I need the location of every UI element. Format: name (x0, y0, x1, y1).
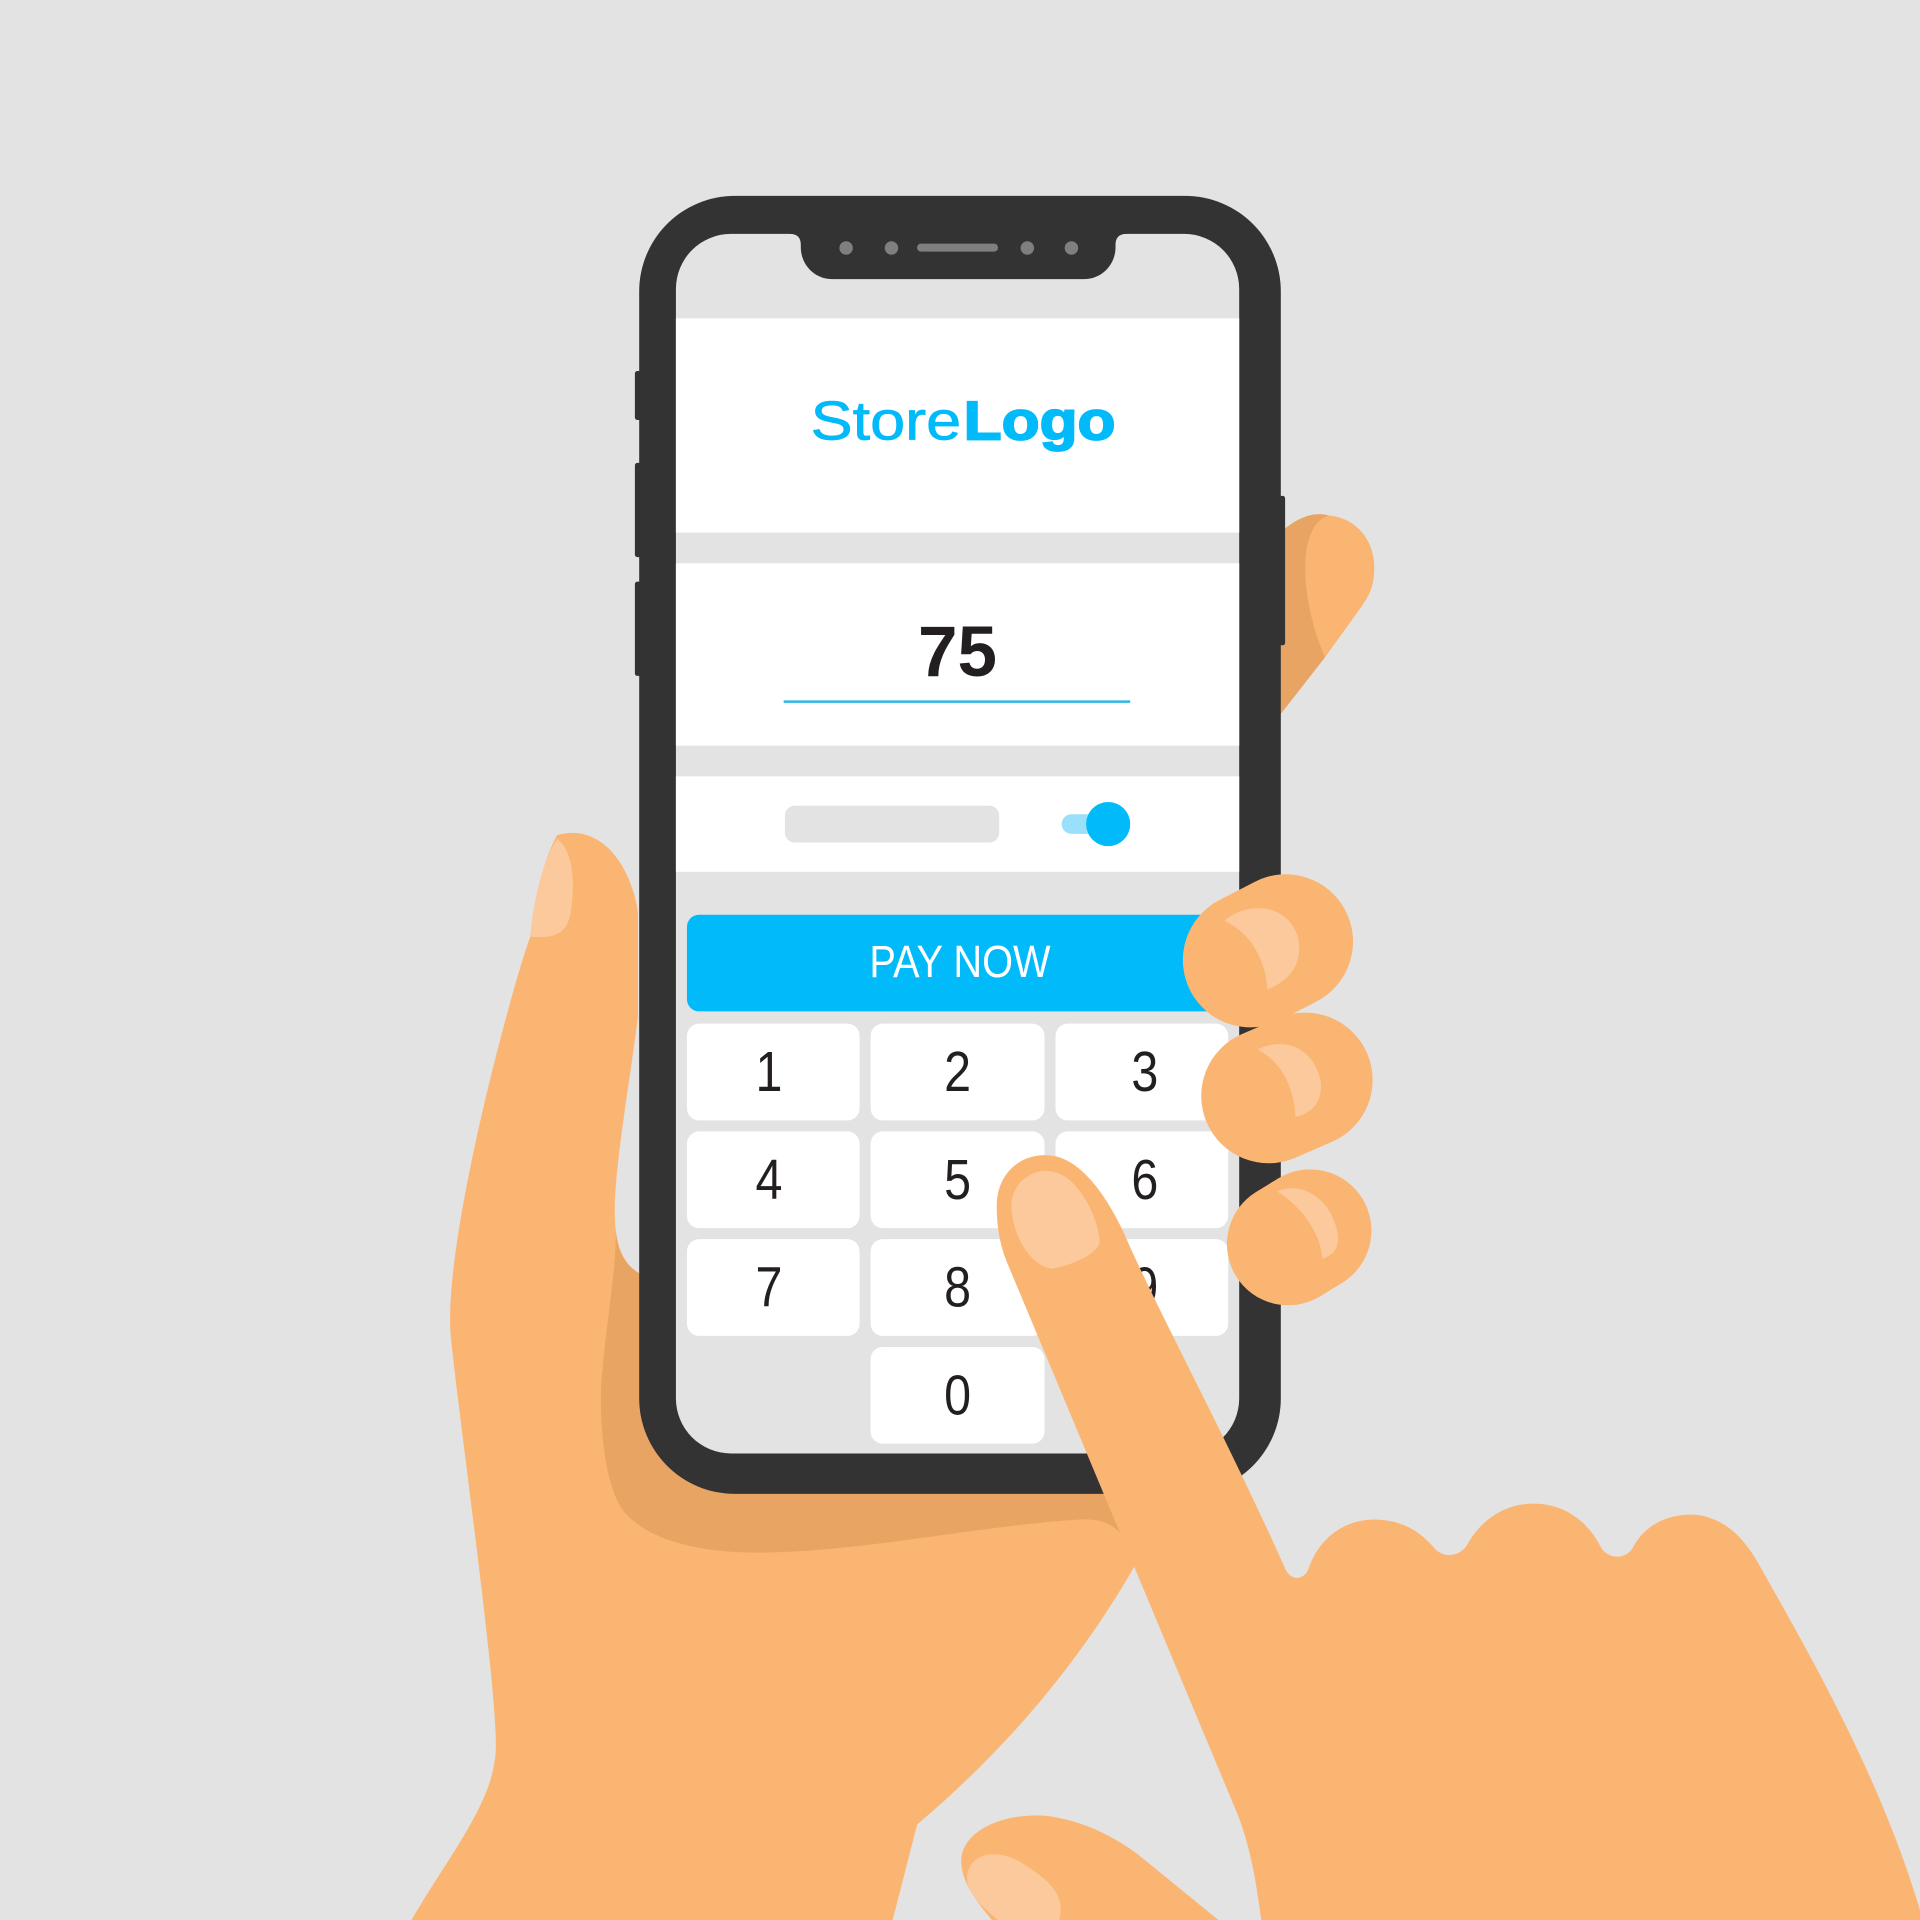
phone body (639, 196, 1281, 1494)
option panel (676, 776, 1239, 872)
store logo (811, 390, 1116, 452)
amount panel (676, 563, 1239, 746)
keypad: 7 (756, 1256, 782, 1319)
finger three (1277, 1188, 1338, 1259)
right hand thumb (961, 1815, 1218, 1920)
side buttons (635, 371, 1285, 676)
store logo: Store (811, 390, 961, 452)
finger one (1224, 908, 1299, 989)
toggle (1062, 802, 1130, 846)
option field (785, 806, 999, 842)
keypad: 8 (944, 1256, 971, 1319)
finger two (1258, 1044, 1321, 1117)
keypad: 6 (1131, 1148, 1158, 1211)
keypad: 3 (1131, 1040, 1158, 1103)
left thumb nail (530, 839, 573, 937)
left hand palm and thumb (411, 833, 1139, 1920)
amount underline (784, 700, 1130, 703)
logo panel (676, 318, 1239, 533)
screen (676, 234, 1239, 1453)
keypad: 4 (756, 1148, 782, 1211)
notch (790, 227, 1127, 279)
pay now button (687, 915, 1226, 1011)
keypad: 1 (756, 1040, 782, 1103)
right hand with pointing finger (997, 1155, 1920, 1920)
keypad: 2 (944, 1040, 971, 1103)
amount: 75 (918, 613, 997, 692)
back fingertip behind phone (1273, 514, 1374, 714)
palm shadow (601, 1231, 1124, 1553)
phone (635, 196, 1285, 1494)
pay now button: PAY NOW (869, 936, 1051, 987)
camera dots and speaker (839, 241, 1078, 255)
keypad: 0 (944, 1363, 971, 1426)
keypad (687, 1024, 1228, 1444)
keypad: 5 (944, 1148, 971, 1211)
store logo: Logo (964, 390, 1116, 452)
keypad: 9 (1131, 1256, 1158, 1319)
